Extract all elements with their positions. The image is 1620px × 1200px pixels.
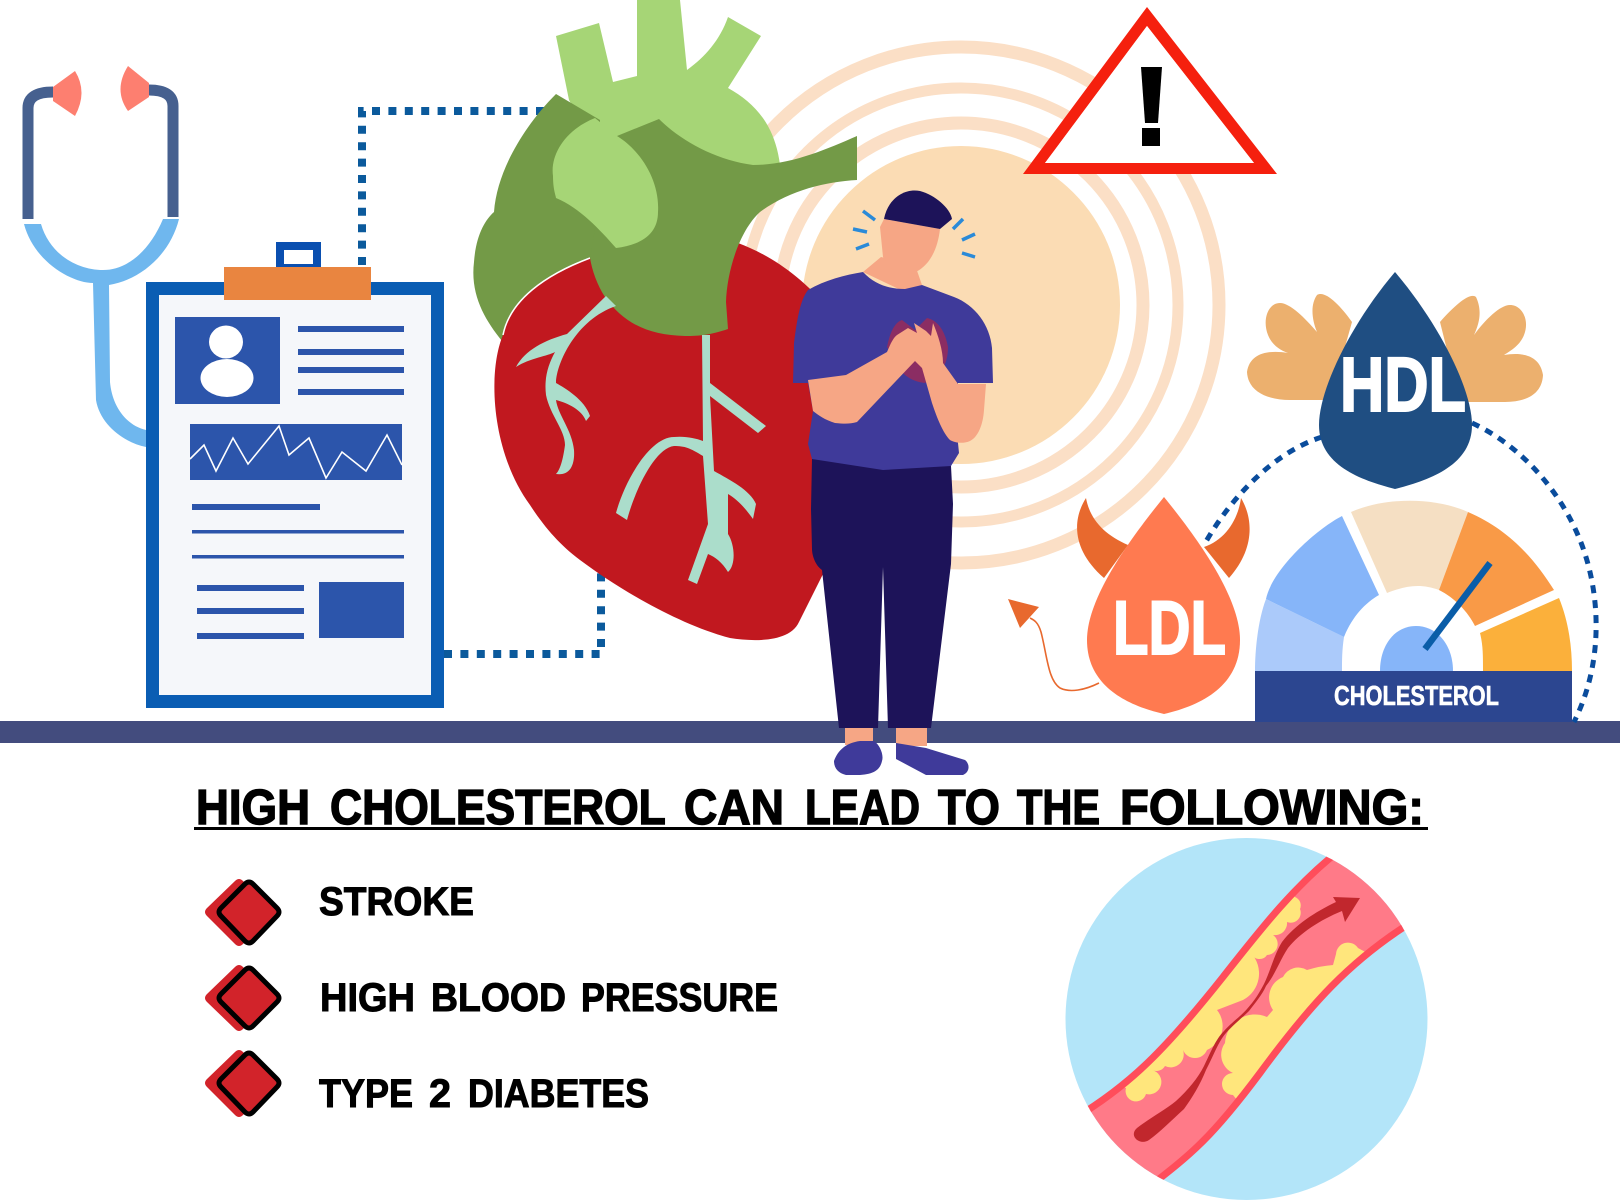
list item: high blood pressure: HIGH — [320, 976, 415, 1020]
list item: high blood pressure: PRESSURE — [581, 976, 778, 1020]
title: LEAD — [805, 781, 920, 835]
HDL angel drop — [1247, 272, 1543, 489]
HDL wings — [1247, 294, 1543, 402]
LDL horns — [1077, 498, 1250, 578]
artery walls — [1088, 856, 1404, 1180]
list item: type 2 diabetes: 2 — [429, 1072, 451, 1116]
title: CAN — [684, 781, 784, 835]
list item: stroke: STROKE — [319, 880, 474, 924]
list item: high blood pressure: BLOOD — [431, 976, 566, 1020]
title: TO — [938, 781, 1000, 835]
title: FOLLOWING: — [1120, 781, 1424, 835]
man clutching chest — [793, 190, 993, 775]
list item: stroke — [205, 879, 474, 946]
title: CHOLESTEROL — [330, 781, 665, 835]
list item: type 2 diabetes: TYPE — [319, 1072, 413, 1116]
list item: type 2 diabetes — [205, 1050, 649, 1117]
heart illustration — [473, 0, 857, 640]
list item: high blood pressure — [205, 965, 778, 1031]
title: HIGH — [196, 781, 310, 835]
floor bar — [0, 721, 1620, 743]
icon: stethoscope — [24, 66, 179, 447]
plaque deposits — [1124, 896, 1364, 1102]
concentric pain rings — [703, 47, 1219, 563]
blood flow arrow — [1134, 897, 1360, 1142]
clogged artery illustration — [1066, 838, 1428, 1200]
LDL devil drop — [1008, 497, 1250, 714]
LDL label: LDL — [1113, 586, 1226, 671]
title — [194, 781, 1428, 835]
HDL label: HDL — [1340, 342, 1466, 428]
icon: warning triangle — [1023, 7, 1277, 174]
gauge label: CHOLESTEROL — [1334, 680, 1499, 711]
title: THE — [1017, 781, 1100, 835]
dotted arc around gauge — [1204, 423, 1596, 722]
cholesterol gauge — [1255, 501, 1572, 722]
list item: type 2 diabetes: DIABETES — [468, 1072, 649, 1116]
LDL tail — [1008, 599, 1099, 690]
icon: medical clipboard — [146, 242, 444, 708]
dotted connector: clipboard to heart — [362, 111, 601, 654]
